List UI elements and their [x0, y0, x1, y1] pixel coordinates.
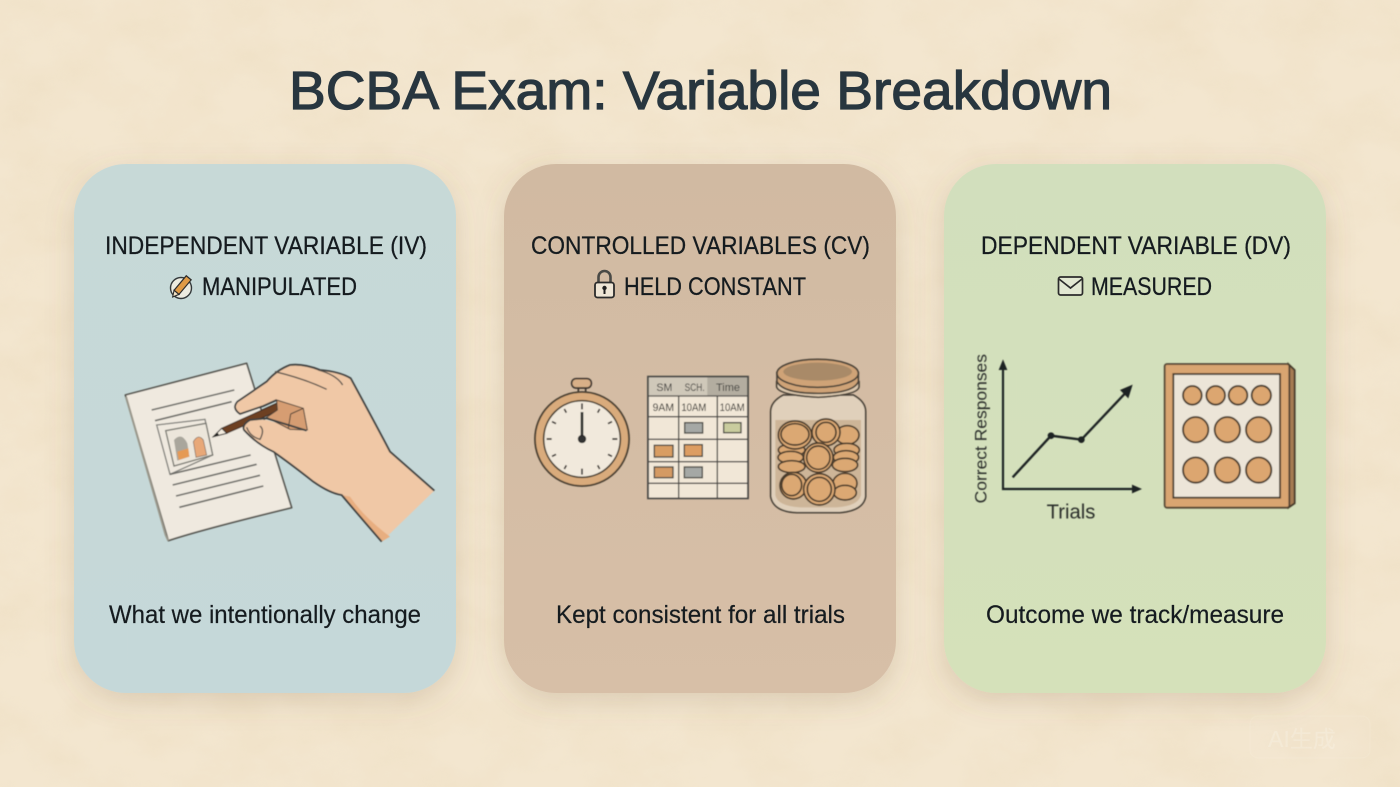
caption: independent variable: What we intentionally change	[109, 601, 421, 629]
illustration: stopwatch, schedule and token jar	[535, 359, 866, 513]
schedule grid	[648, 377, 748, 498]
panel: dependent variable	[944, 164, 1326, 693]
caption: controlled variables: Kept consistent for all trials	[556, 601, 845, 629]
illustration: hand writing on paper	[125, 363, 434, 542]
label: held constant: HELD CONSTANT	[624, 273, 806, 301]
label: manipulated: MANIPULATED	[202, 273, 357, 301]
schedule grid: 10AM	[720, 402, 745, 414]
tokens	[778, 419, 859, 505]
title: BCBA Exam: Variable Breakdown	[289, 61, 1112, 121]
icon: pencil	[170, 276, 192, 299]
schedule grid: SCH.	[685, 382, 705, 394]
heading: independent variable: INDEPENDENT VARIABLE (IV)	[105, 232, 427, 260]
watermark	[1250, 716, 1370, 758]
illustration: line chart and token board	[973, 354, 1295, 523]
token jar	[771, 359, 866, 513]
token board	[1165, 364, 1295, 508]
paper	[125, 363, 292, 541]
label: measured: MEASURED	[1091, 273, 1212, 301]
schedule grid: 9AM	[653, 402, 674, 414]
line chart: Trials	[1047, 501, 1095, 523]
heading: controlled variables: CONTROLLED VARIABLES (CV)	[531, 232, 870, 260]
schedule grid: SM	[656, 382, 672, 394]
panel: independent variable	[74, 164, 456, 693]
schedule grid: Time	[716, 382, 740, 394]
icon: envelope	[1058, 277, 1082, 295]
line chart	[973, 354, 1142, 523]
stopwatch	[535, 379, 629, 486]
icon: padlock	[595, 271, 614, 298]
caption: dependent variable: Outcome we track/measure	[986, 601, 1284, 629]
line chart: Correct Responses	[973, 354, 991, 503]
pencil	[213, 403, 278, 437]
schedule grid: 10AM	[681, 402, 706, 414]
watermark: AI生成	[1268, 726, 1336, 752]
hand	[235, 365, 434, 542]
panel: controlled variables	[504, 164, 896, 693]
heading: dependent variable: DEPENDENT VARIABLE (DV)	[981, 232, 1291, 260]
